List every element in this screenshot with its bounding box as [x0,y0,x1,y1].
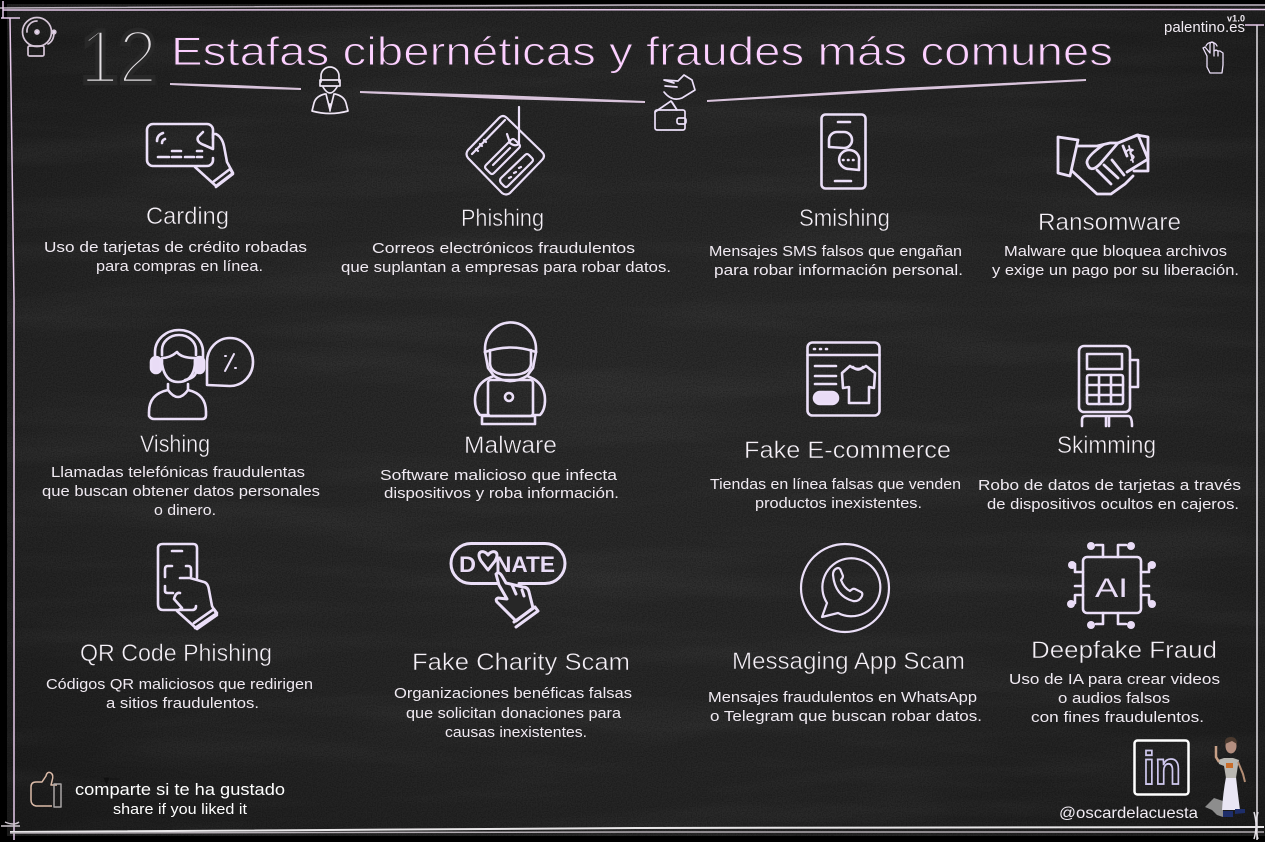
heading: Phishing [461,205,544,232]
description: con fines fraudulentos. [1031,710,1204,726]
icon: phone QR scan in hand [158,544,217,629]
icon: AI chip [1067,542,1156,629]
description: Llamadas telefónicas fraudulentas [51,465,305,481]
icon: credit card in hand [147,124,233,187]
description: Mensajes SMS falsos que engañan [709,244,962,260]
description: Correos electrónicos fraudulentos [372,241,635,257]
description: Malware que bloquea archivos [1004,244,1227,260]
icon: donate button and hand: D [459,552,476,577]
icon: pointing hand [1203,42,1223,73]
icon: card terminal [1079,346,1138,426]
heading: Malware [464,432,557,459]
description: dispositivos y roba información. [384,486,619,502]
description: para compras en línea. [96,259,263,275]
icon: donate button and hand [451,544,565,627]
palentino.es credit: v1.0 [1227,14,1245,24]
card: Phishing [341,107,671,276]
title: Estafas cibernéticas y fraudes más comunes [171,30,1113,74]
card: Deepfake Fraud [1009,542,1220,726]
description: productos inexistentes. [755,496,922,512]
card: Carding [44,124,307,275]
share message [75,778,285,818]
cartoon character [1205,737,1245,817]
heading: Fake E-commerce [744,437,951,464]
description: o dinero. [154,503,216,519]
description: Software malicioso que infecta [380,468,618,484]
icon: AI chip: AI [1095,573,1128,603]
description: causas inexistentes. [445,725,587,741]
icon: WhatsApp logo [801,544,889,632]
card: Vishing [42,330,320,519]
description: Mensajes fraudulentos en WhatsApp [708,690,977,706]
big number 12: 12 [80,15,157,100]
card: Ransomware [992,135,1239,279]
card: Skimming [978,346,1241,513]
share message: comparte si te ha gustado [75,780,285,799]
description: Uso de tarjetas de crédito robadas [44,240,307,256]
description: de dispositivos ocultos en cajeros. [987,497,1239,513]
description: para robar información personal. [714,263,963,279]
heading: Carding [146,203,229,230]
description: a sitios fraudulentos. [106,696,259,712]
icon: donate button and hand: NATE [495,552,555,577]
heading: Vishing [140,431,210,458]
icon: hand stealing from wallet [655,75,695,130]
description: Tiendas en línea falsas que venden [710,477,961,493]
icon: handshake with money [1058,135,1148,194]
palentino.es credit: palentino.es [1164,19,1245,36]
LinkedIn handle: @oscardelacuesta [1059,805,1198,822]
card: Messaging App Scam [708,544,982,725]
icon: LinkedIn: in [1143,742,1181,794]
title underlines [170,79,1086,103]
heading: Fake Charity Scam [412,649,630,676]
description: o Telegram que buscan robar datos. [710,709,982,725]
description: Códigos QR maliciosos que redirigen [46,677,313,693]
icon: call agent with bubble [149,330,253,419]
icon: phone with chat bubbles [822,114,866,188]
heading: Ransomware [1038,209,1181,236]
description: y exige un pago por su liberación. [992,263,1239,279]
share message: share if you liked it [113,801,248,818]
card: Fake E-commerce [710,342,961,512]
icon: thumbs up [31,772,61,807]
description: o audios falsos [1058,691,1170,707]
description: Organizaciones benéficas falsas [394,686,632,702]
card: Fake Charity Scam [394,544,632,741]
icon: shop window with shirt [808,342,880,416]
card: Smishing [709,114,963,279]
heading: Skimming [1057,432,1156,459]
heading: Messaging App Scam [732,648,965,675]
description: que suplantan a empresas para robar datos. [341,260,671,276]
heading: Deepfake Fraud [1031,637,1217,664]
card: QR Code Phishing [46,544,313,712]
icon: phishing hook browser [466,107,544,194]
heading: Smishing [799,205,890,232]
description: que solicitan donaciones para [406,706,622,722]
description: que buscan obtener datos personales [42,484,320,500]
description: Robo de datos de tarjetas a través [978,478,1241,494]
icon: hooded thief [312,67,348,114]
heading: QR Code Phishing [80,640,272,667]
card: Malware [380,322,619,502]
icon: hooded hacker with laptop [475,322,545,424]
icon: alarm bell [22,18,56,56]
description: Uso de IA para crear videos [1009,672,1220,688]
